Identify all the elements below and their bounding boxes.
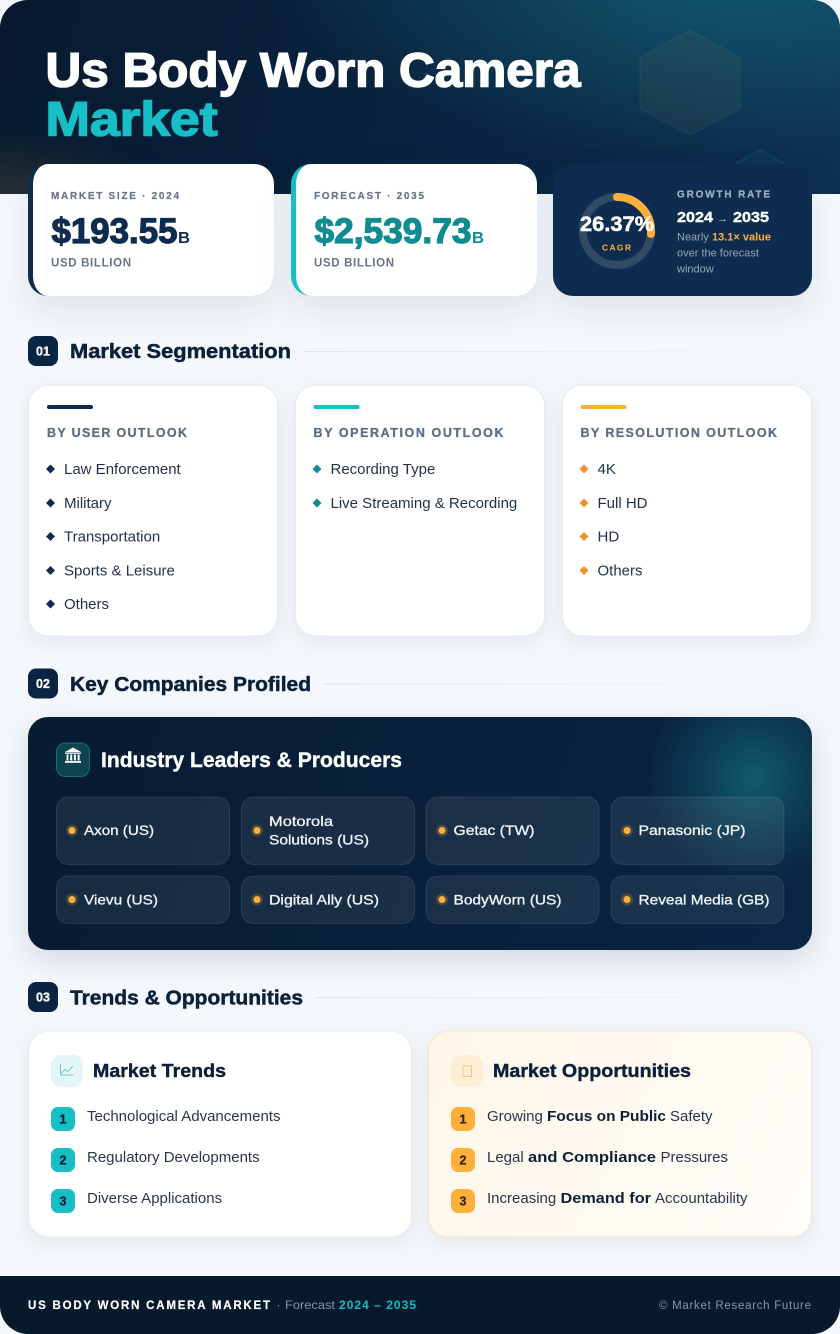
growth rate text: GROWTH RATE	[677, 190, 770, 200]
panel: key companies	[28, 717, 812, 950]
company chip: Axon	[56, 797, 230, 864]
list: operation outlook items: Live Streaming & Recording	[330, 495, 517, 512]
opportunity item 1: Focus on Public	[547, 1108, 666, 1125]
company chip: Axon: Axon (US)	[84, 822, 154, 838]
opportunity item 3: 3	[460, 1194, 467, 1208]
growth rate text: 2035	[733, 210, 769, 226]
trend item 2	[51, 1148, 260, 1172]
section heading: 02 Key Companies Profiled	[28, 668, 812, 698]
opportunity item 1: Growing	[487, 1108, 543, 1125]
footer credit: © Market Research Future	[659, 1300, 811, 1312]
stat card: forecast 2035	[291, 164, 537, 296]
list: user outlook items	[46, 461, 182, 613]
company chip: Reveal Media	[611, 876, 784, 924]
growth rate text: 2024	[677, 210, 713, 226]
title: Us Body Worn Camera	[46, 44, 581, 98]
list: operation outlook items: Recording Type	[330, 461, 435, 478]
donut chart: CAGR: 26.37%	[580, 213, 654, 236]
company chip: Motorola Solutions: Solutions (US)	[269, 832, 369, 848]
icon: chart	[51, 1055, 83, 1087]
stat card: market size 2024: USD BILLION	[51, 258, 131, 270]
trend item 3	[51, 1189, 222, 1213]
list: operation outlook items	[312, 461, 517, 512]
opportunity item 3	[451, 1189, 748, 1213]
title: Market	[46, 94, 218, 146]
panel: by operation outlook	[296, 385, 544, 636]
company chip: Panasonic	[611, 797, 784, 864]
trend item 1	[51, 1107, 280, 1131]
stat card: market size 2024: $193.55	[52, 212, 178, 251]
panel: by resolution outlook	[562, 385, 812, 636]
footer forecast range: 2024 – 2035	[339, 1298, 416, 1312]
opportunity item 1: Safety	[670, 1108, 713, 1125]
section heading: 03 Trends & Opportunities: Trends & Opportunities	[70, 986, 303, 1010]
title	[46, 44, 581, 146]
list: user outlook items: Sports & Leisure	[64, 562, 175, 580]
icon: decorative small hexagon	[720, 150, 800, 194]
company chip: Motorola Solutions	[242, 797, 414, 864]
growth rate text: over the forecast	[677, 248, 759, 260]
panel: by user outlook	[28, 385, 278, 636]
header banner	[0, 0, 840, 194]
section heading: 03 Trends & Opportunities	[28, 982, 812, 1012]
list: user outlook items: Military	[64, 495, 112, 512]
opportunity item 3: Demand for	[560, 1190, 651, 1207]
opportunity item 1: 1	[460, 1112, 467, 1126]
list: user outlook items: Transportation	[64, 528, 160, 546]
growth rate text: 13.1× value	[712, 232, 771, 244]
company chip: BodyWorn: BodyWorn (US)	[454, 892, 562, 908]
stat card: market size 2024: MARKET SIZE · 2024	[51, 191, 179, 202]
stat card: forecast 2035: B	[472, 230, 484, 247]
company chip: Panasonic: Panasonic (JP)	[638, 822, 746, 838]
trend item 1: 1	[60, 1112, 67, 1126]
list: resolution outlook items: Full HD	[598, 495, 648, 512]
opportunity item 2: and Compliance	[528, 1149, 656, 1166]
opportunity item 2: 2	[460, 1154, 467, 1168]
section heading: 01 Market Segmentation: Market Segmentation	[70, 340, 291, 363]
company chip: Vievu: Vievu (US)	[84, 892, 158, 908]
growth rate text: window	[676, 264, 714, 276]
heading: by user outlook: BY USER OUTLOOK	[47, 426, 187, 440]
company chip: Digital Ally	[242, 876, 414, 924]
footer title: US BODY WORN CAMERA MARKET	[28, 1300, 270, 1312]
company chip: Getac: Getac (TW)	[454, 822, 534, 838]
section heading: 01 Market Segmentation: 01	[36, 344, 50, 358]
panel heading: Industry Leaders & Producers	[101, 748, 402, 772]
company chip: BodyWorn	[426, 876, 599, 924]
section heading: 02 Key Companies Profiled: 02	[36, 677, 50, 691]
growth rate text: Nearly	[677, 232, 709, 244]
footer	[0, 1276, 840, 1334]
opportunity item 2	[451, 1148, 728, 1172]
section heading: 03 Trends & Opportunities: 03	[36, 990, 50, 1004]
trend item 2: Regulatory Developments	[87, 1149, 260, 1166]
list: user outlook items: Others	[64, 596, 109, 613]
donut chart: CAGR	[580, 197, 654, 265]
stat card: growth rate	[553, 164, 812, 296]
section heading: 02 Key Companies Profiled: Key Companies Profiled	[70, 673, 311, 696]
company chip: Getac	[426, 797, 599, 864]
footer forecast range: Forecast	[285, 1298, 336, 1312]
list: resolution outlook items: 4K	[598, 461, 616, 478]
donut chart: CAGR: CAGR	[602, 242, 631, 252]
opportunity item 3: Accountability	[655, 1190, 748, 1207]
list: resolution outlook items: HD	[598, 528, 619, 546]
company chip: Vievu	[56, 876, 230, 924]
list: resolution outlook items	[580, 461, 648, 580]
opportunity item 2: Pressures	[660, 1149, 728, 1166]
company chip: Digital Ally: Digital Ally (US)	[269, 892, 379, 908]
heading: by operation outlook: BY OPERATION OUTLOOK	[314, 426, 504, 440]
opportunity item 3: Increasing	[487, 1190, 556, 1207]
growth rate text: →	[717, 213, 728, 225]
heading: market trends: Market Trends	[93, 1060, 226, 1081]
heading: market opportunities: Market Opportunities	[493, 1060, 691, 1081]
section heading: 01 Market Segmentation	[28, 336, 812, 366]
panel: market opportunities	[428, 1031, 812, 1237]
footer forecast range	[276, 1298, 416, 1312]
company chip: Reveal Media: Reveal Media (GB)	[638, 892, 770, 908]
stat card: forecast 2035: $2,539.73	[314, 212, 472, 251]
stat card: forecast 2035: USD BILLION	[314, 258, 394, 270]
trend item 3: 3	[60, 1194, 67, 1208]
footer forecast range: ·	[276, 1298, 280, 1312]
trend item 3: Diverse Applications	[87, 1190, 222, 1207]
icon: institution	[56, 743, 90, 776]
company chip: Motorola Solutions: Motorola	[269, 813, 333, 829]
panel: market trends	[28, 1031, 412, 1237]
icon: decorative large hexagon	[640, 30, 740, 135]
stat card: forecast 2035: FORECAST · 2035	[314, 191, 424, 202]
icon: missing glyph box	[451, 1055, 483, 1087]
list: resolution outlook items: Others	[598, 562, 643, 580]
stat card: market size 2024: B	[178, 230, 190, 247]
opportunity item 1	[451, 1107, 713, 1131]
opportunity item 2: Legal	[487, 1149, 524, 1166]
trend item 2: 2	[60, 1154, 67, 1168]
stat card: market size 2024	[28, 164, 274, 296]
list: user outlook items: Law Enforcement	[64, 461, 182, 478]
trend item 1: Technological Advancements	[87, 1108, 280, 1125]
heading: by resolution outlook: BY RESOLUTION OUTLOOK	[580, 426, 777, 440]
growth rate text	[676, 190, 771, 276]
